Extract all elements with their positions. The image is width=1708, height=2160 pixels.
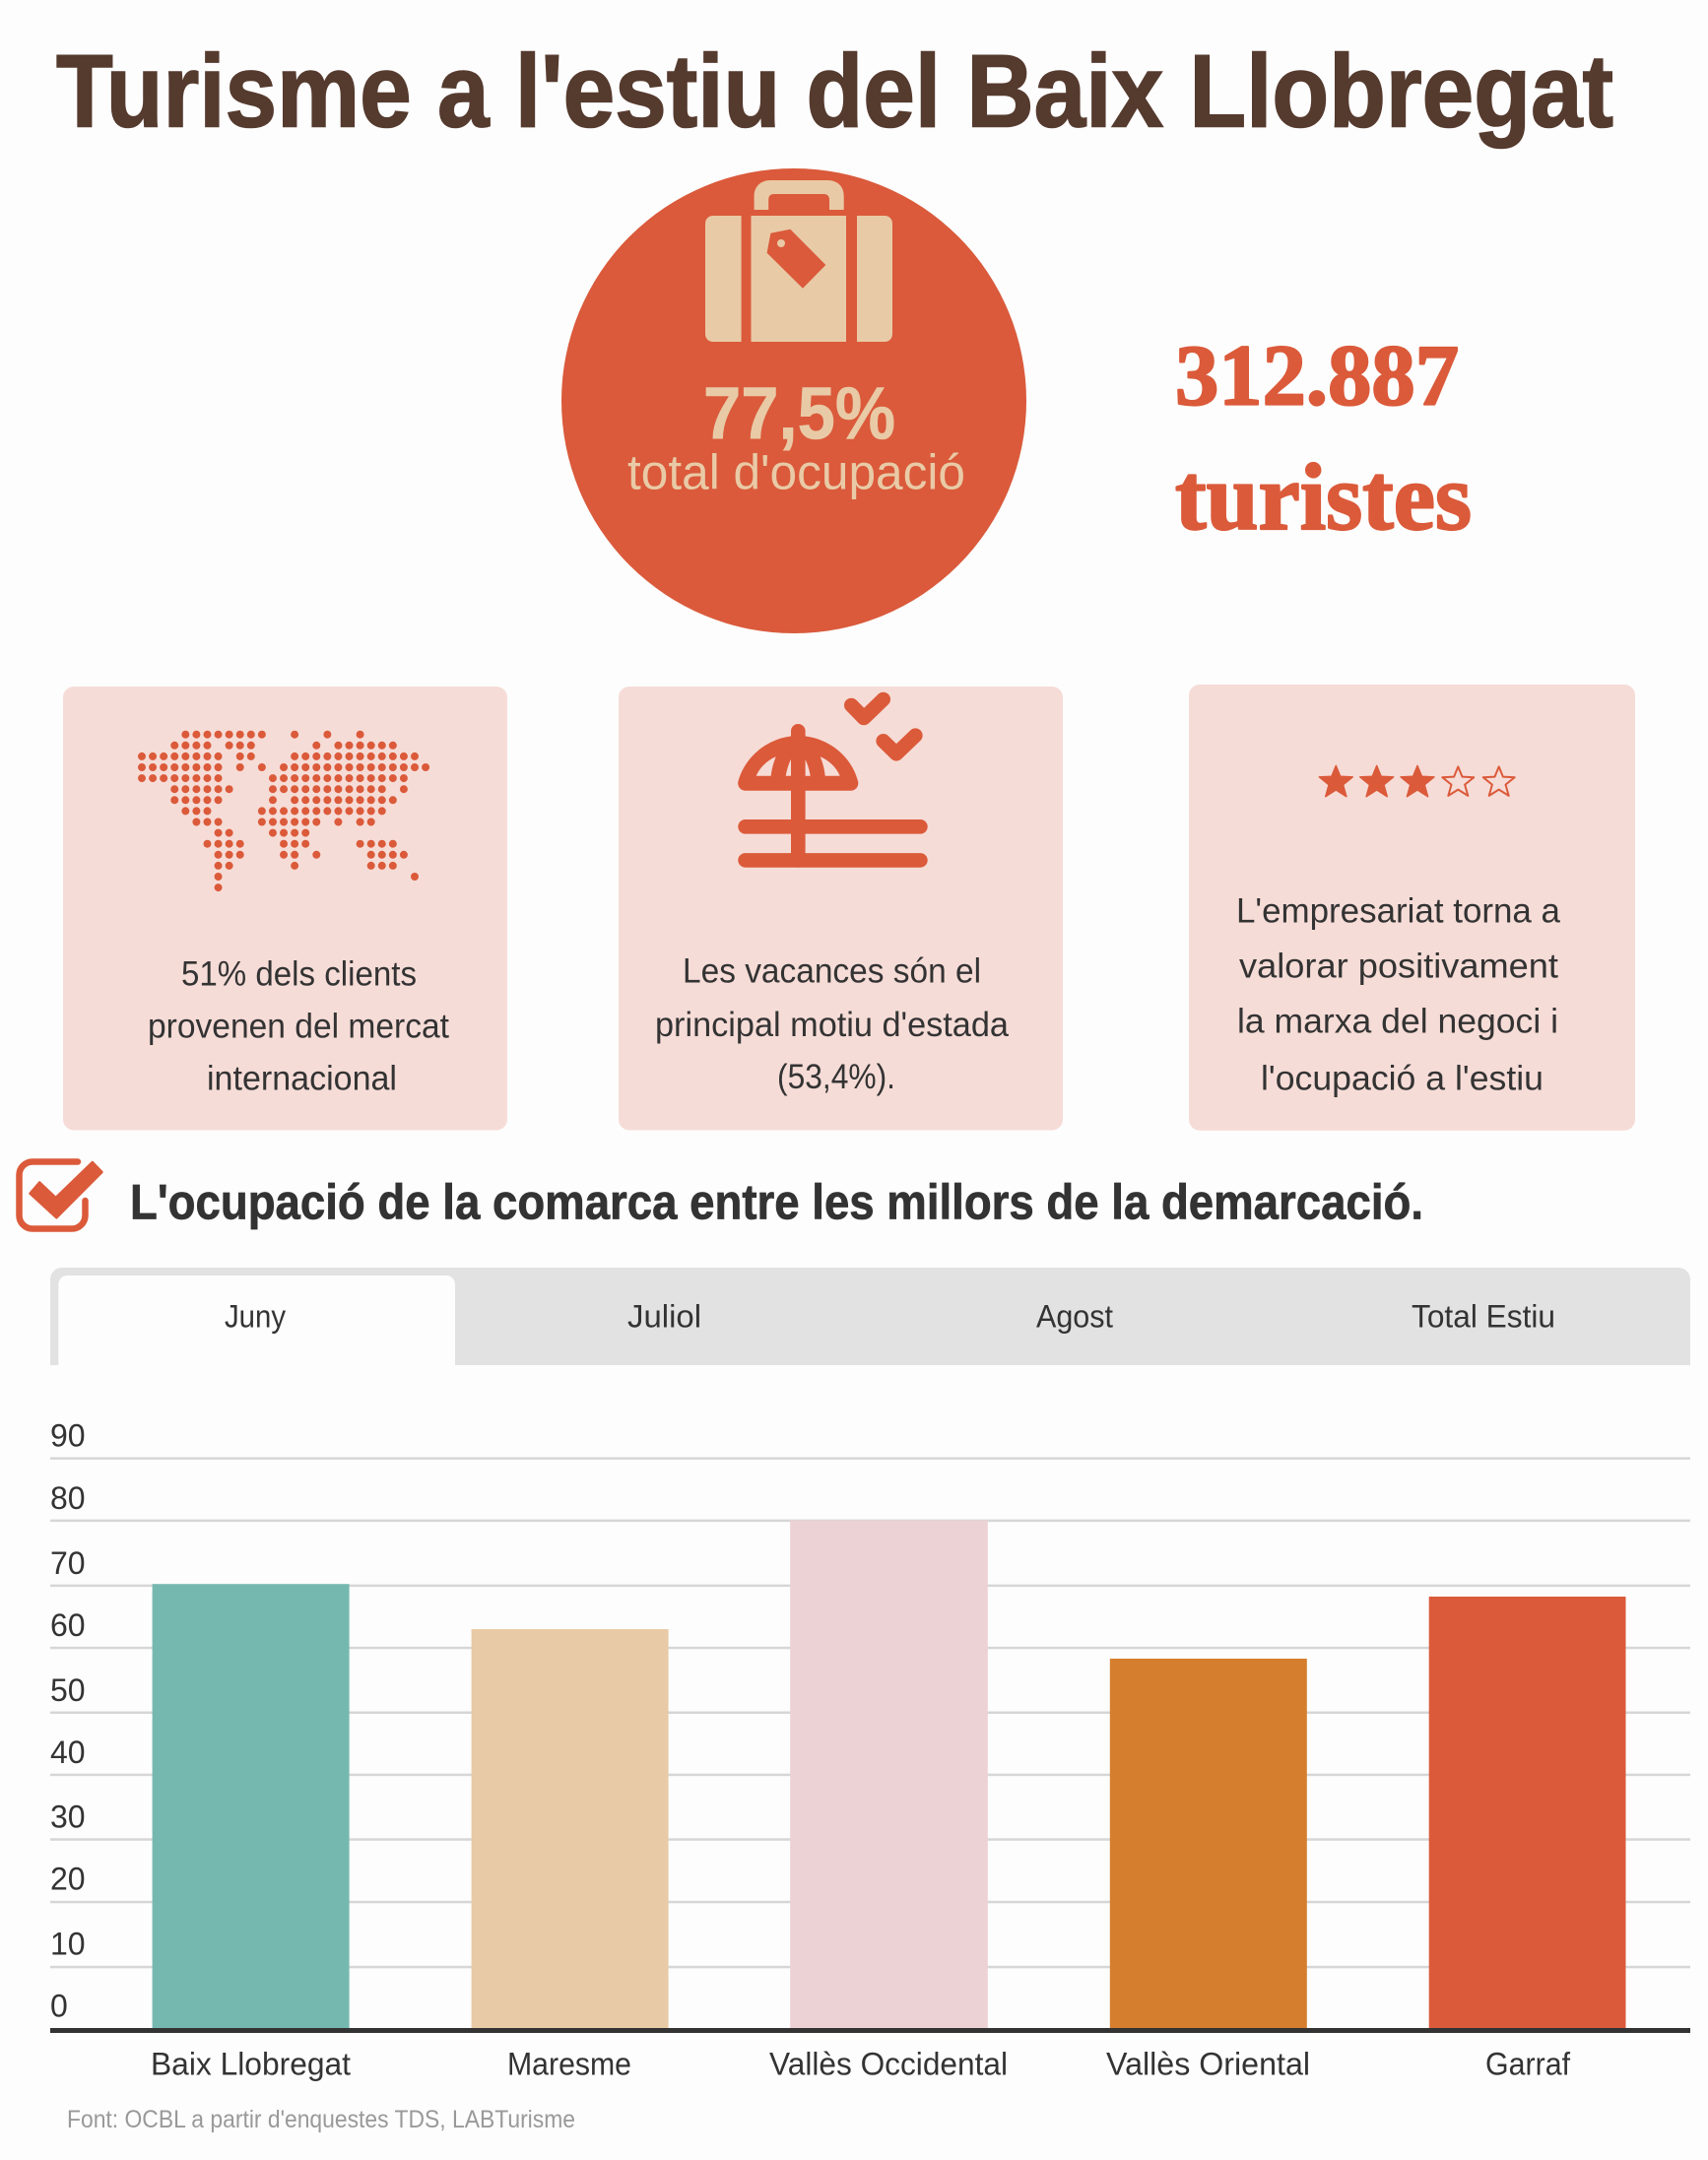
tab bar — [50, 1268, 1690, 1365]
y axis labels: 80 — [50, 1480, 86, 1516]
chart gridlines — [50, 1457, 1690, 1968]
card text: L'empresariat torna a — [1236, 892, 1561, 931]
x axis labels: Vallès Occidental — [769, 2047, 1008, 2082]
icon: dotted world map — [142, 735, 426, 887]
panel: international clients — [63, 687, 507, 1131]
card text: Les vacances són el — [683, 951, 981, 990]
card text: internacional — [207, 1060, 397, 1098]
tab bar background — [50, 1268, 1690, 1365]
icon: rating stars — [1319, 765, 1515, 797]
card text — [148, 955, 449, 1098]
panel: occupancy circle — [561, 168, 1026, 633]
tab labels: Agost — [1036, 1298, 1113, 1334]
y axis labels: 60 — [50, 1607, 86, 1643]
section heading: L'ocupació de la comarca entre les millors de la demarcació. — [130, 1174, 1423, 1229]
card text: (53,4%). — [777, 1058, 895, 1096]
panel: business rating — [1189, 685, 1635, 1131]
card text: l'ocupació a l'estiu — [1261, 1060, 1544, 1098]
x axis labels — [151, 2047, 1570, 2082]
card background — [1189, 685, 1635, 1131]
y axis labels: 0 — [50, 1988, 68, 2023]
x axis labels: Garraf — [1485, 2047, 1570, 2082]
y axis labels: 20 — [50, 1862, 86, 1897]
bars — [153, 1521, 1626, 2028]
y axis labels: 10 — [50, 1927, 86, 1962]
y axis labels: 70 — [50, 1545, 86, 1581]
card text: 51% dels clients — [181, 955, 417, 994]
icon: suitcase with tag — [705, 180, 892, 342]
circle background — [561, 168, 1026, 633]
occupancy label: total d'ocupació — [627, 445, 965, 500]
bar chart — [50, 1417, 1690, 2082]
card background — [63, 687, 507, 1131]
tab labels — [225, 1298, 1555, 1334]
section heading with check icon — [20, 1162, 1423, 1229]
icon: checked box — [20, 1162, 102, 1229]
y axis labels: 50 — [50, 1672, 86, 1708]
card text: la marxa del negoci i — [1237, 1003, 1558, 1041]
card text: provenen del mercat — [148, 1007, 449, 1045]
card text — [1236, 892, 1561, 1098]
y axis labels: 40 — [50, 1735, 86, 1770]
y axis labels: 90 — [50, 1417, 86, 1453]
x axis line — [50, 2028, 1690, 2033]
tab labels: Juny — [225, 1298, 286, 1334]
tourist count callout — [1175, 329, 1472, 550]
panel: holidays motive — [619, 687, 1063, 1131]
x axis labels: Baix Llobregat — [151, 2047, 351, 2082]
occupancy percentage: 77,5% — [703, 372, 895, 455]
x axis labels: Maresme — [507, 2047, 631, 2082]
tourist number: 312.887 — [1175, 329, 1459, 425]
source note: Font: OCBL a partir d'enquestes TDS, LABTurisme — [67, 2106, 575, 2133]
card text: principal motiu d'estada — [655, 1006, 1010, 1044]
card text — [655, 951, 1010, 1096]
icon: beach umbrella with checks — [738, 699, 920, 860]
y axis labels: 30 — [50, 1800, 86, 1835]
active tab: Juny — [58, 1276, 455, 1365]
tourists word: turistes — [1175, 444, 1472, 550]
card background — [619, 687, 1063, 1131]
y axis labels — [50, 1417, 86, 2023]
tab labels: Total Estiu — [1412, 1298, 1555, 1334]
x axis labels: Vallès Oriental — [1106, 2047, 1310, 2082]
card text: valorar positivament — [1239, 948, 1558, 986]
tab labels: Juliol — [627, 1298, 701, 1334]
